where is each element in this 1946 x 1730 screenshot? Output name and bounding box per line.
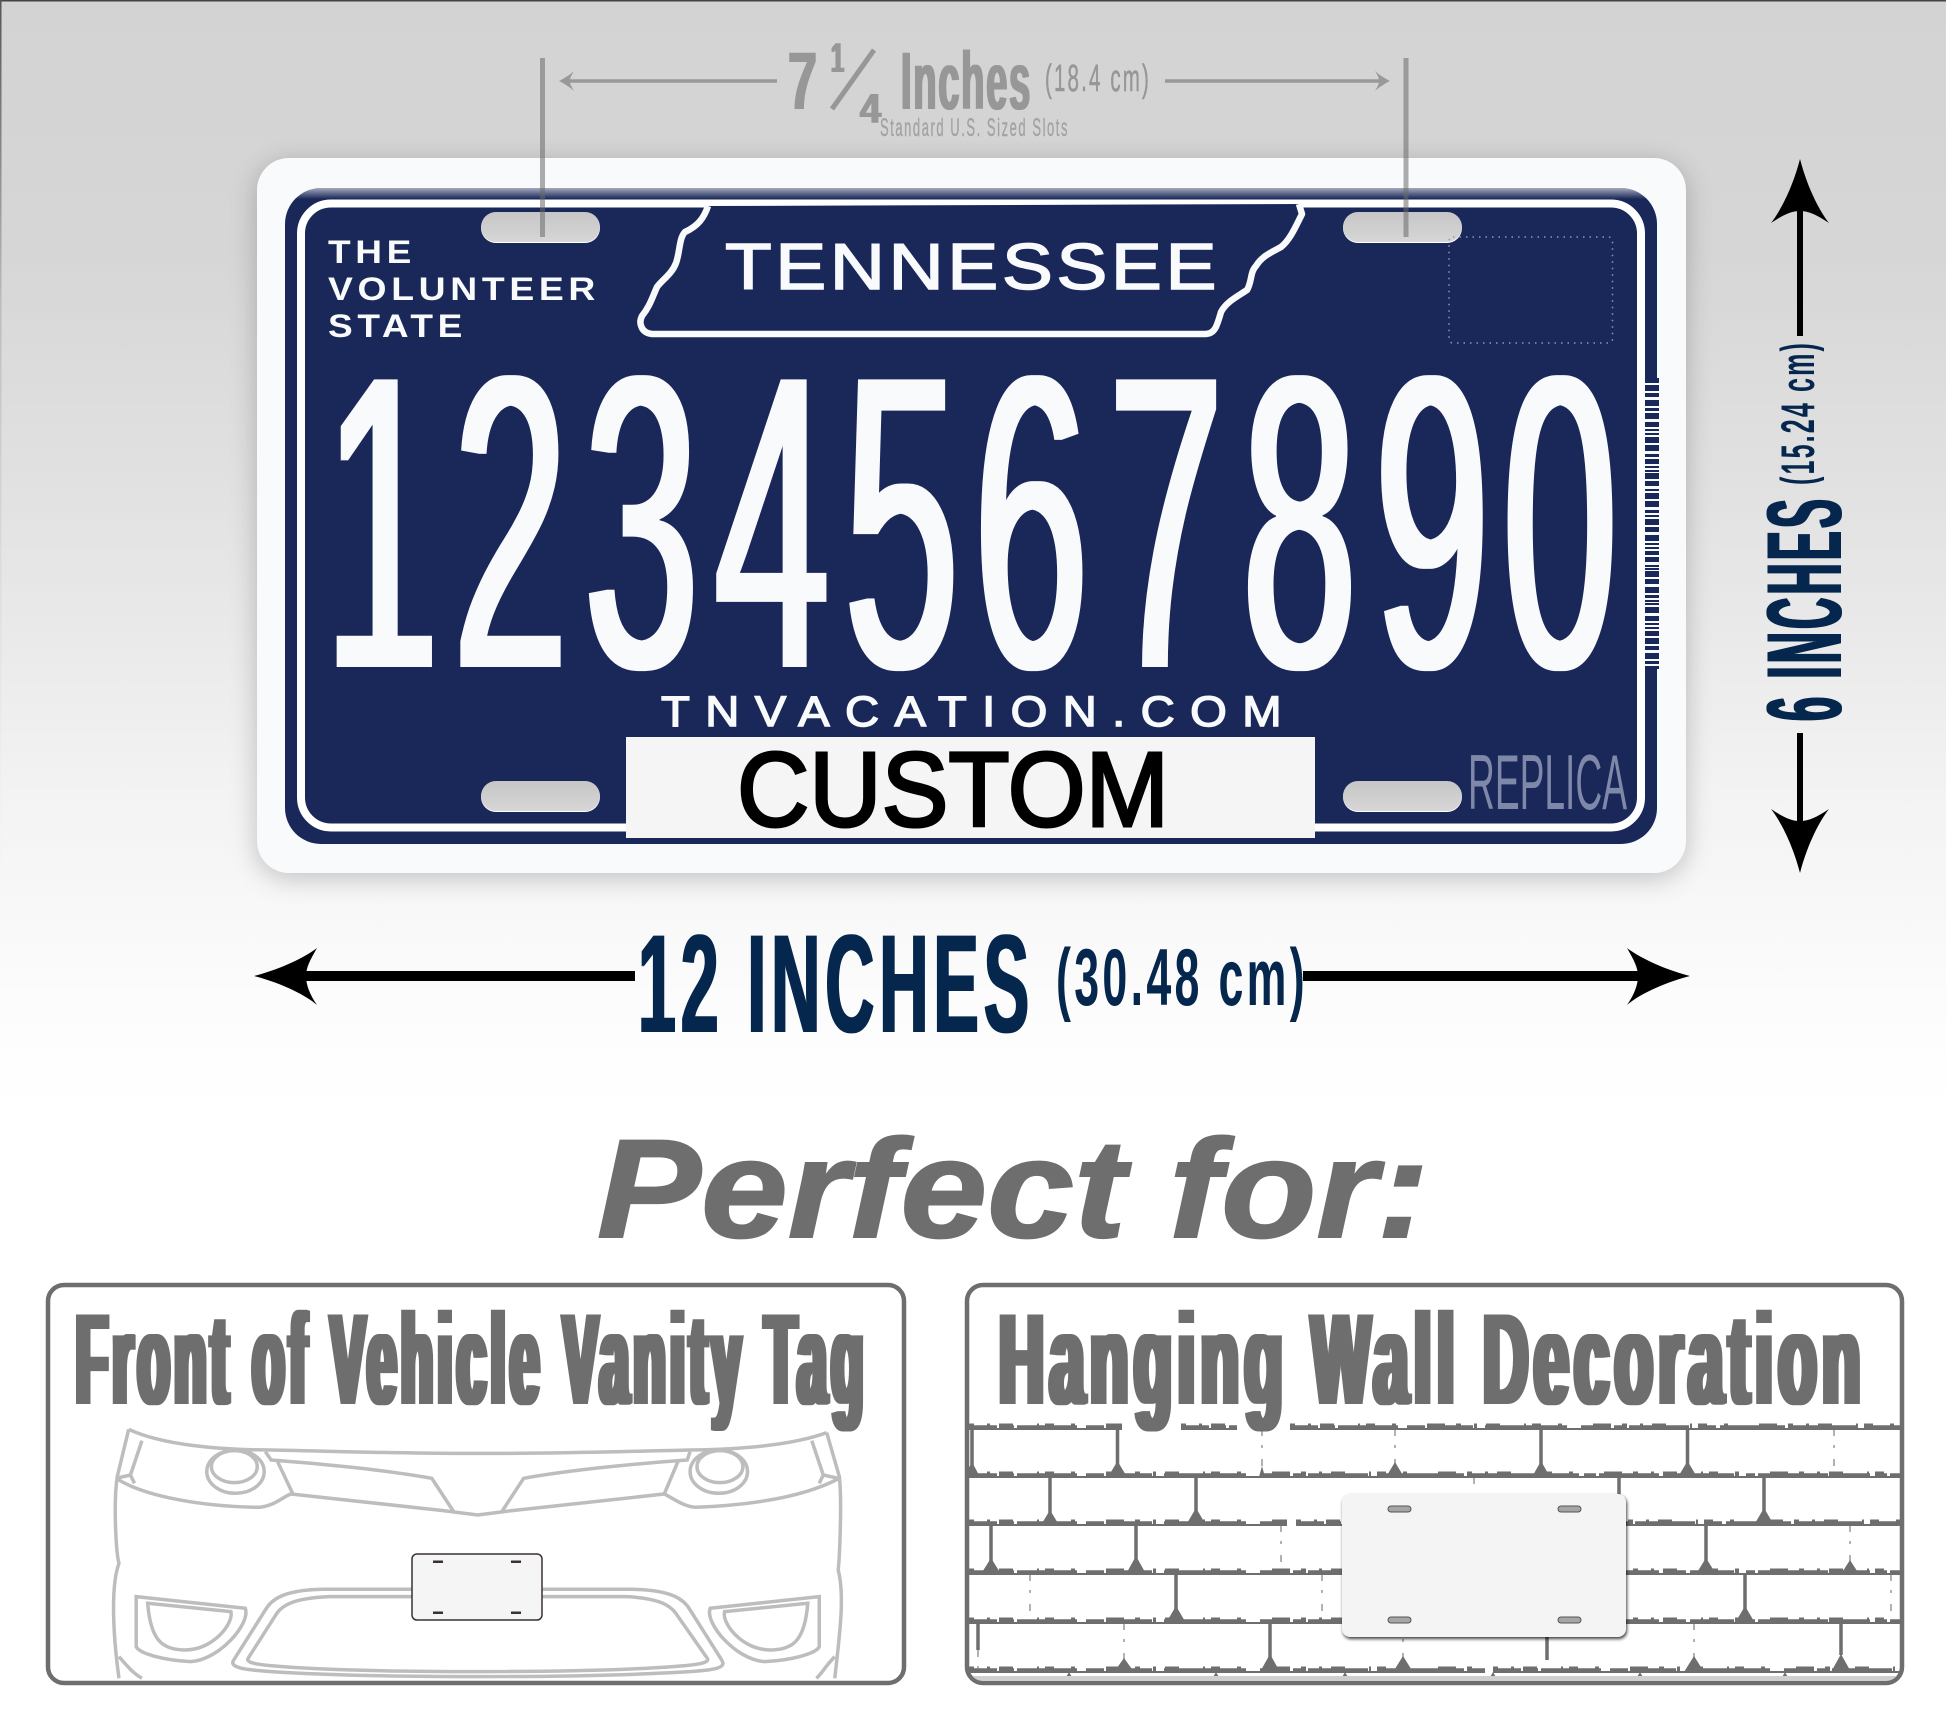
width dimension: 12 INCHES [638,905,1034,1062]
Tennessee state outline [640,204,1302,334]
website: TNVACATION.COM [661,688,1297,736]
slot spacing label: (18.4 cm) [1045,58,1151,100]
plate number: 1234567890 [325,289,1617,756]
mounting slots [481,212,1462,812]
slot guide lines [540,58,1408,237]
sticker placeholder [1449,237,1612,343]
heading: Perfect for: Perfect for: [597,1110,1429,1267]
height dimension: 6 INCHES [1744,496,1864,721]
width arrow left [254,948,635,1005]
brick wall [964,1426,1900,1681]
slot spacing dimension [540,34,1408,237]
height metric label: (15.24 cm) [1771,341,1824,485]
hanging plate on wall [1342,1494,1626,1637]
state motto: STATE [328,308,467,344]
license plate: REPLICA [1468,738,1627,826]
panel: hanging wall decoration [964,1285,1902,1683]
panel frame left [48,1285,904,1683]
slot spacing label: 4 [860,85,882,132]
width dimension [254,905,1690,1062]
width arrow right [1303,948,1690,1005]
license plate [257,158,1686,873]
panel frame right [967,1285,1902,1683]
slot spacing label: 7 [788,36,817,127]
custom text strip: CUSTOM [737,731,1169,849]
plate blue field [285,188,1657,844]
panel: front of vehicle vanity tag [48,1285,904,1683]
slot spacing arrow right [1165,71,1390,91]
slot spacing label: Inches [901,36,1032,127]
width metric label: (30.48 cm) [1056,933,1308,1023]
slot spacing label: 1 [831,34,844,81]
state motto [328,234,600,344]
state motto: THE [328,234,416,270]
small plate on car [412,1554,542,1620]
plate base [257,158,1686,873]
slot spacing label: Standard U.S. Sized Slots [880,114,1069,142]
height arrow bottom [1771,733,1829,873]
barcode strip [1643,378,1660,669]
state name: TENNESSEE [725,230,1220,303]
height arrow top [1771,159,1829,336]
slot spacing label [788,34,1151,142]
state motto: VOLUNTEER [328,271,600,307]
car front outline [114,1429,841,1678]
slot spacing arrow left [559,71,777,91]
custom text strip [626,731,1315,849]
